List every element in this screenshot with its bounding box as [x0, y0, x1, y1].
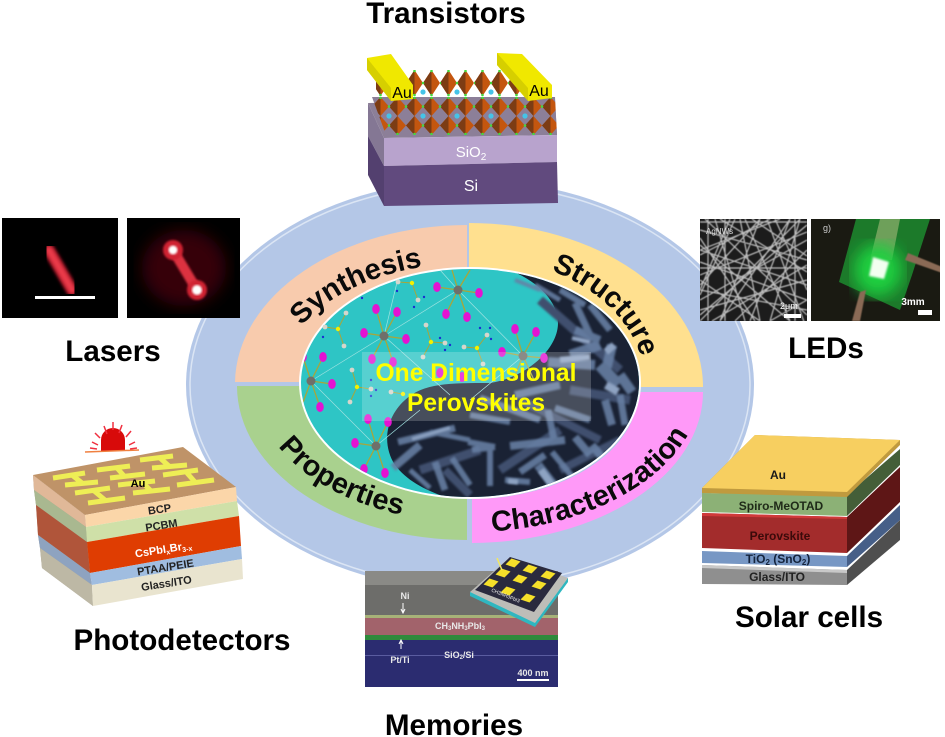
device: transistor stack: Si [464, 178, 478, 195]
icon: red alarm light [85, 422, 139, 452]
device: memory cross-section: /Si [463, 650, 474, 660]
gold electrodes [53, 456, 214, 503]
CsPbI layer [87, 516, 241, 573]
heading: Photodetectors: Photodetectors [73, 624, 291, 657]
teal background [301, 269, 639, 497]
device: photodetector stack: BCP [147, 502, 172, 518]
device: memory cross-section: Ni [400, 591, 410, 601]
substrate top face [368, 100, 557, 138]
curved label: Properties: Properties [279, 434, 403, 514]
lattice lines [311, 270, 523, 446]
gold top face [33, 447, 236, 515]
image: glowing green LED device: 3mm [901, 297, 925, 308]
side faces [368, 103, 384, 166]
octahedra: lead and iodine atoms [299, 270, 548, 478]
device: photodetector stack: PCBM [145, 518, 178, 534]
device: memory cross-section: 3 [482, 626, 486, 632]
curved label: Characterization: Characterization [492, 429, 688, 531]
segment: synthesis [235, 225, 467, 382]
image: silver nanowire network: AgNWs [706, 227, 733, 236]
device: solar cell stack: (SnO [770, 552, 802, 566]
segment: structure [469, 223, 703, 387]
heading: Solar cells: Solar cells [735, 601, 883, 634]
device: solar cell stack: Spiro-MeOTAD [739, 499, 824, 513]
centre image: crystal lattice and microrods [299, 260, 660, 500]
curved label: Synthesis: Synthesis [290, 250, 420, 323]
device: memory cross-section: CH [435, 621, 448, 631]
device: memory cross-section: 3 [448, 626, 452, 632]
image: laser emission below threshold [2, 218, 118, 318]
device: solar cell stack: Glass/ITO [749, 570, 805, 584]
device: photodetector stack: Au [131, 478, 145, 490]
device: memory cross-section [365, 557, 568, 687]
right gold contact [497, 53, 552, 101]
heading: LEDs: LEDs [788, 332, 864, 365]
device: memory cross-section: 400 nm [517, 668, 549, 678]
device: photodetector stack: Br [169, 541, 184, 555]
image: silver nanowire network: 2μm [780, 301, 798, 311]
gold layer [702, 435, 900, 497]
device: solar cell stack: TiO [746, 552, 765, 566]
heading: Lasers: Lasers [65, 335, 161, 368]
device: solar cell stack: 2 [802, 558, 807, 567]
device: transistor stack: 2 [481, 152, 487, 163]
device: transistor stack: Au [529, 83, 549, 100]
device: photodetector stack: PTAA/PEIE [136, 558, 195, 578]
Glass layer [92, 559, 243, 606]
microrods SEM [387, 273, 639, 497]
device: solar cell stack: Au [770, 468, 786, 482]
segment: properties [237, 386, 467, 540]
image: glowing green LED device [811, 219, 945, 321]
device: solar cell stack [702, 435, 900, 585]
segment: characterization [472, 392, 703, 543]
device: memory cross-section: 2 [460, 655, 464, 661]
SiO2 layer [384, 135, 557, 166]
inset: memory chip with gold electrodes [470, 557, 568, 627]
image: laser emission above threshold [127, 218, 240, 318]
device: solar cell stack: 2 [765, 558, 770, 567]
image: glowing green LED device: g) [823, 223, 831, 233]
PCBM layer [86, 501, 239, 542]
inset: memory chip with gold electrodes: CH3NH3PbI3 [490, 588, 521, 605]
device: photodetector stack: Glass/ITO [140, 574, 193, 594]
device: memory cross-section: 3 [464, 626, 468, 632]
device: memory cross-section: NH [451, 621, 464, 631]
image: silver nanowire network [700, 219, 807, 330]
device: memory cross-section: PbI [468, 621, 482, 631]
centre title: Perovskites [407, 390, 545, 417]
centre title: One Dimensional [376, 360, 576, 387]
device: transistor stack [367, 53, 558, 206]
device: solar cell stack: ) [806, 552, 810, 566]
organic cations [322, 280, 492, 404]
perovskite layer [702, 513, 847, 553]
BCP layer [85, 487, 237, 527]
TiO2 layer [702, 551, 847, 567]
device: solar cell stack: Perovskite [750, 529, 811, 543]
device: transistor stack: Au [392, 85, 412, 102]
device: memory cross-section: SiO [444, 650, 460, 660]
spiro layer [702, 493, 847, 516]
translucent title box [362, 352, 591, 421]
device: memory cross-section: Pt/Ti [390, 655, 410, 665]
PTAA layer [90, 546, 242, 585]
glass layer [702, 565, 847, 585]
device: photodetector stack: x [166, 549, 171, 557]
device: photodetector stack: CsPbI [134, 544, 167, 560]
device: photodetector stack: 3-x [182, 546, 193, 554]
curved label: Structure: Structure [554, 254, 654, 354]
background ellipse [186, 180, 754, 590]
device: transistor stack: SiO [456, 144, 481, 161]
Si layer [384, 162, 558, 206]
ring of four topics [235, 223, 703, 543]
device: photodetector stack [33, 447, 243, 606]
left gold contact [367, 54, 413, 101]
perovskite crystal layer [372, 97, 557, 135]
